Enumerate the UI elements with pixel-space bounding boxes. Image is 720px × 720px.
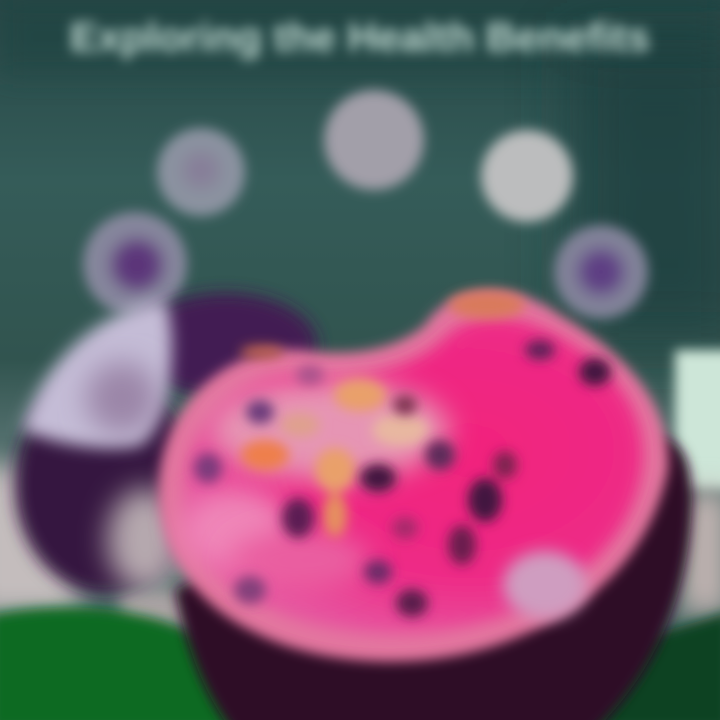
outer skin: [175, 438, 692, 720]
title: Exploring the Health Benefits: [70, 14, 650, 60]
icon circle: upper left: [157, 128, 245, 216]
cut dragon fruit: [158, 291, 692, 720]
icon circle: far left: [83, 212, 187, 316]
icon circles: [83, 90, 648, 319]
pink flesh: [185, 317, 643, 634]
pale flesh patches: [503, 551, 587, 619]
dark seeds: [194, 340, 611, 617]
icon circle: upper right: [481, 130, 573, 222]
whole dragon fruit, left: [15, 293, 317, 593]
icon circle: top centre: [324, 90, 424, 190]
green leaves: [0, 608, 720, 720]
icon circle: far right: [554, 225, 648, 319]
pale rim: [158, 291, 668, 662]
nut topping: [240, 291, 525, 537]
